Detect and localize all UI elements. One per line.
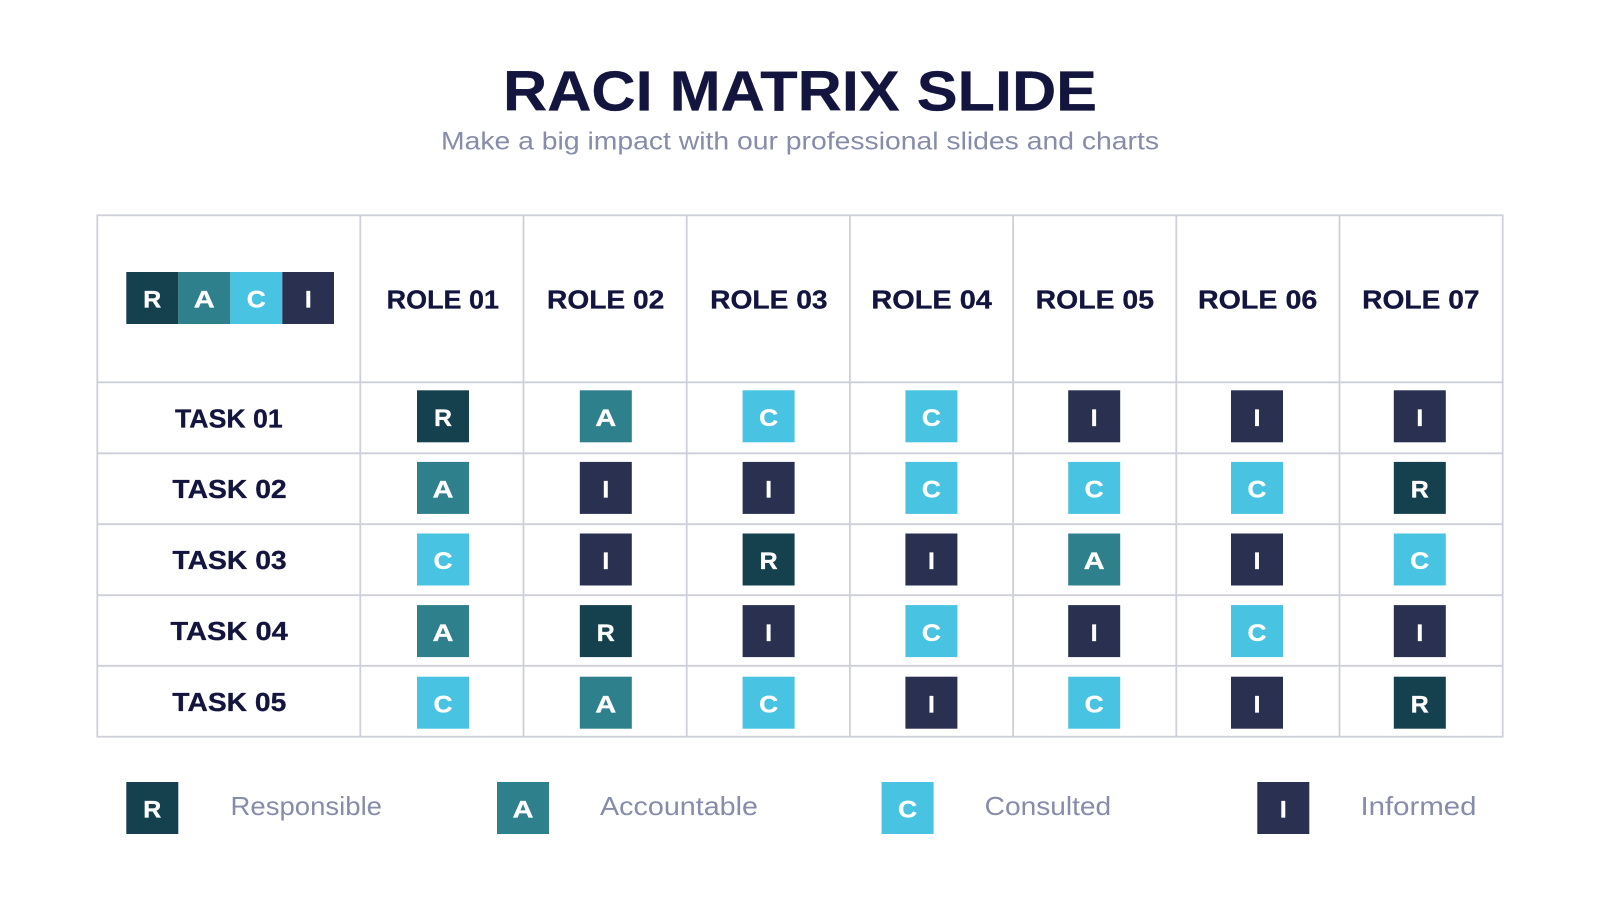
row: task 05 assignments: I: [1254, 691, 1260, 718]
role headers: ROLE 05: [1036, 286, 1154, 314]
table grid: [97, 215, 1503, 737]
row: task 04 assignments: I: [765, 620, 772, 647]
row: task 05 assignments: [417, 677, 1446, 729]
row: task 05 assignments: A: [595, 691, 617, 718]
header RACI key: C: [247, 287, 266, 314]
row: task 03 assignments: A: [1084, 548, 1105, 575]
role headers: ROLE 07: [1362, 286, 1480, 314]
header RACI key: R: [143, 287, 162, 314]
role headers: ROLE 06: [1198, 286, 1317, 314]
matrix table: [97, 215, 1503, 737]
row: task 01 assignments: C: [922, 405, 941, 432]
legend: informed: [1257, 782, 1476, 834]
row: task 02 assignments: R: [1411, 477, 1429, 504]
legend: [126, 782, 1476, 834]
row: task 01 assignments: A: [595, 405, 617, 432]
row: task 03 assignments: R: [760, 548, 778, 575]
row: task 05 assignments: C: [1085, 691, 1104, 718]
legend: informed: I: [1280, 797, 1287, 824]
row: task 01 assignments: I: [1416, 405, 1423, 432]
legend: accountable: Accountable: [600, 791, 758, 821]
task labels: TASK 01: [175, 405, 283, 433]
row: task 02 assignments: C: [1248, 477, 1267, 504]
row: task 04 assignments: R: [597, 620, 615, 647]
row: task 01 assignments: I: [1091, 405, 1098, 432]
row: task 03 assignments: I: [928, 548, 935, 575]
row: task 02 assignments: [417, 462, 1446, 514]
header RACI key: I: [305, 287, 312, 314]
role headers: ROLE 04: [871, 286, 993, 314]
row: task 02 assignments: A: [432, 477, 454, 504]
row: task 05 assignments: C: [434, 691, 453, 718]
row: task 02 assignments: I: [602, 477, 609, 504]
subtitle: Make a big impact with our professional slides and charts: [441, 128, 1159, 156]
task labels: TASK 04: [170, 618, 289, 646]
legend: accountable: A: [512, 797, 534, 824]
role headers: ROLE 02: [547, 286, 664, 314]
row: task 03 assignments: [417, 534, 1446, 586]
legend: consulted: Consulted: [985, 791, 1111, 821]
legend: accountable: [497, 782, 758, 834]
role headers: ROLE 03: [710, 286, 828, 314]
task labels: TASK 05: [172, 689, 286, 717]
task labels: [170, 405, 289, 717]
legend: responsible: R: [143, 797, 162, 824]
legend: responsible: Responsible: [230, 791, 382, 821]
row: task 01 assignments: [417, 390, 1446, 442]
row: task 02 assignments: C: [1085, 477, 1104, 504]
row: task 04 assignments: A: [432, 620, 454, 647]
legend: responsible: [126, 782, 382, 834]
row: task 03 assignments: I: [602, 548, 609, 575]
role headers: [387, 286, 1480, 314]
row: task 04 assignments: I: [1416, 620, 1423, 647]
task labels: TASK 03: [172, 547, 287, 575]
task labels: TASK 02: [172, 476, 287, 504]
title: RACI MATRIX SLIDE: [503, 59, 1097, 122]
role headers: ROLE 01: [387, 286, 499, 314]
row: task 04 assignments: I: [1091, 620, 1098, 647]
row: task 02 assignments: C: [922, 477, 941, 504]
row: task 02 assignments: I: [765, 477, 772, 504]
row: task 03 assignments: C: [434, 548, 453, 575]
row: task 04 assignments: [417, 605, 1446, 657]
row: task 05 assignments: I: [928, 691, 935, 718]
row: task 03 assignments: I: [1254, 548, 1260, 575]
row: task 01 assignments: I: [1254, 405, 1260, 432]
row: task 01 assignments: C: [759, 405, 778, 432]
row: task 05 assignments: C: [759, 691, 778, 718]
row: task 03 assignments: C: [1410, 548, 1430, 575]
row: task 04 assignments: C: [1248, 620, 1267, 647]
row: task 01 assignments: R: [434, 405, 452, 432]
row: task 05 assignments: R: [1411, 691, 1429, 718]
legend: consulted: C: [898, 797, 917, 824]
header RACI key: [126, 272, 334, 324]
header RACI key: A: [194, 287, 215, 314]
legend: informed: Informed: [1360, 791, 1476, 821]
row: task 04 assignments: C: [922, 620, 941, 647]
legend: consulted: [882, 782, 1111, 834]
